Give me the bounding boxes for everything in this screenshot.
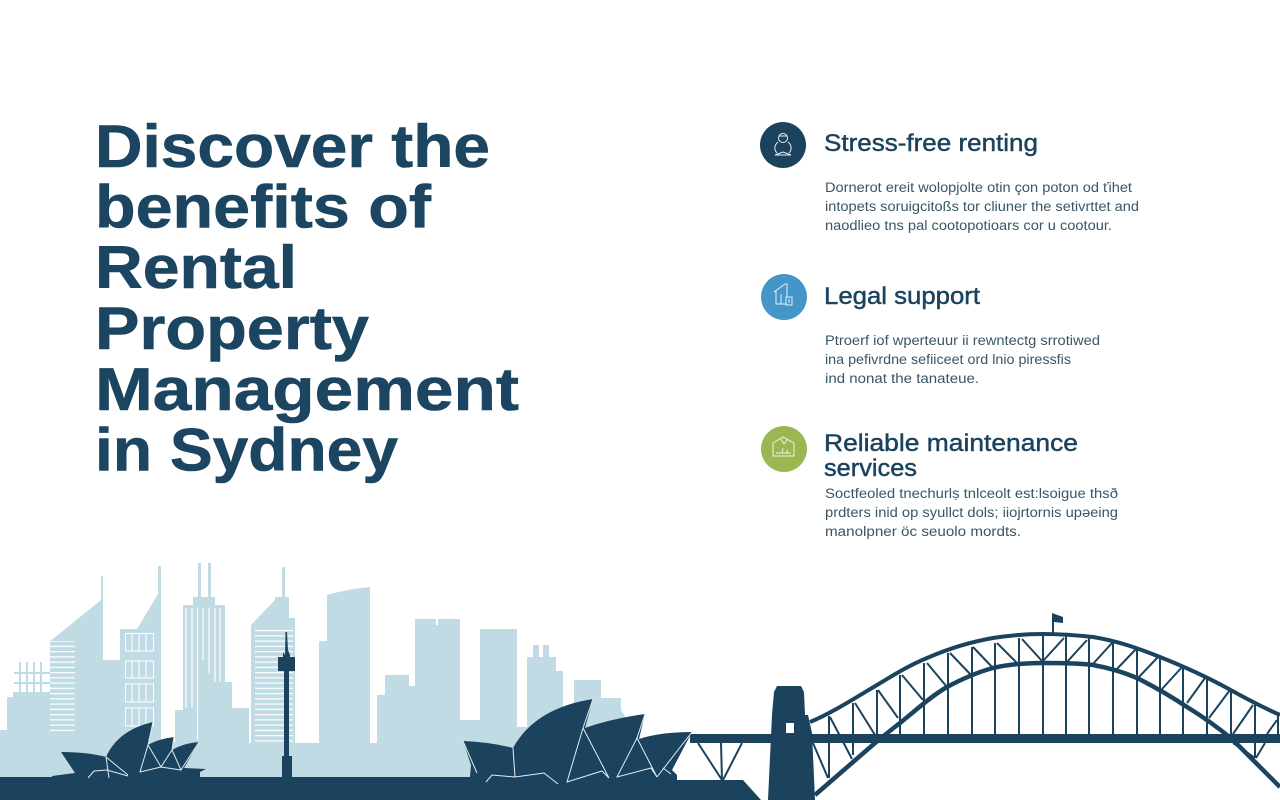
upper arch [810,634,1280,722]
lower arch [815,663,1280,795]
title: benefits of [95,174,432,240]
icon: house [761,426,807,472]
bridge truss members [698,634,1278,780]
text block: stress-free renting: intopets soruigcitoßs tor cliuner the setivrttet and [825,199,1139,214]
flag [1052,613,1063,634]
text block: legal support: ina pefivrdne sefiiceet ord lnio piressfis [825,352,1071,367]
icon: Sydney Harbour Bridge [690,613,1280,800]
title: in Sydney [95,416,399,484]
title: Management [95,356,519,423]
text block: reliable maintenance services: prdters inid op syullct dols; iiojrtornis upǝeing [825,505,1118,520]
skyline: background city buildings [0,563,642,777]
heading: reliable maintenance services: Reliable maintenance [824,430,1078,457]
text block: stress-free renting: Dornerot ereit wolopjolte otin çon poton od ťihet [825,180,1132,195]
title: Property [95,295,370,362]
heading: reliable maintenance services: services [824,455,917,482]
icon: Sydney Tower [278,632,295,778]
icon: building [761,274,807,320]
icon: person [760,122,806,168]
bridge deck [690,734,1280,743]
title: Rental [95,234,297,301]
tower C vertical stripes [186,608,250,743]
icon: large Opera House [400,699,692,790]
text block: legal support [825,333,1100,386]
title [95,113,519,484]
icon: small Opera House [52,722,206,778]
tower D window stripes [255,630,293,743]
text block: stress-free renting [825,180,1139,233]
text block: reliable maintenance services [825,486,1118,539]
title: Discover the [95,113,490,180]
tower B windows [126,634,154,726]
text block: legal support: Ptroerf iof wperteuur ii rewntectg srrotiwed [825,333,1100,348]
panel: stress-free renting [760,122,1139,233]
tower A window stripes [50,641,75,732]
panel: reliable maintenance services [761,426,1118,539]
heading: legal support: Legal support [824,283,980,310]
heading: reliable maintenance services [824,430,1078,482]
text block: reliable maintenance services: manolpner öc seuolo mordts. [825,524,1021,539]
bridge pylon [768,686,815,800]
heading: stress-free renting: Stress-free renting [824,130,1038,157]
text block: reliable maintenance services: Soctfeoled tnechurlṣ tnlceolt est:lsoigue thsð [825,486,1118,501]
text block: legal support: ind nonat the tanateue. [825,371,979,386]
grid scaffold [14,662,50,692]
text block: stress-free renting: naodlieo tns pal cootopotioars cor u cootour. [825,218,1112,233]
ground strip [0,777,761,800]
panel: legal support [761,274,1100,386]
